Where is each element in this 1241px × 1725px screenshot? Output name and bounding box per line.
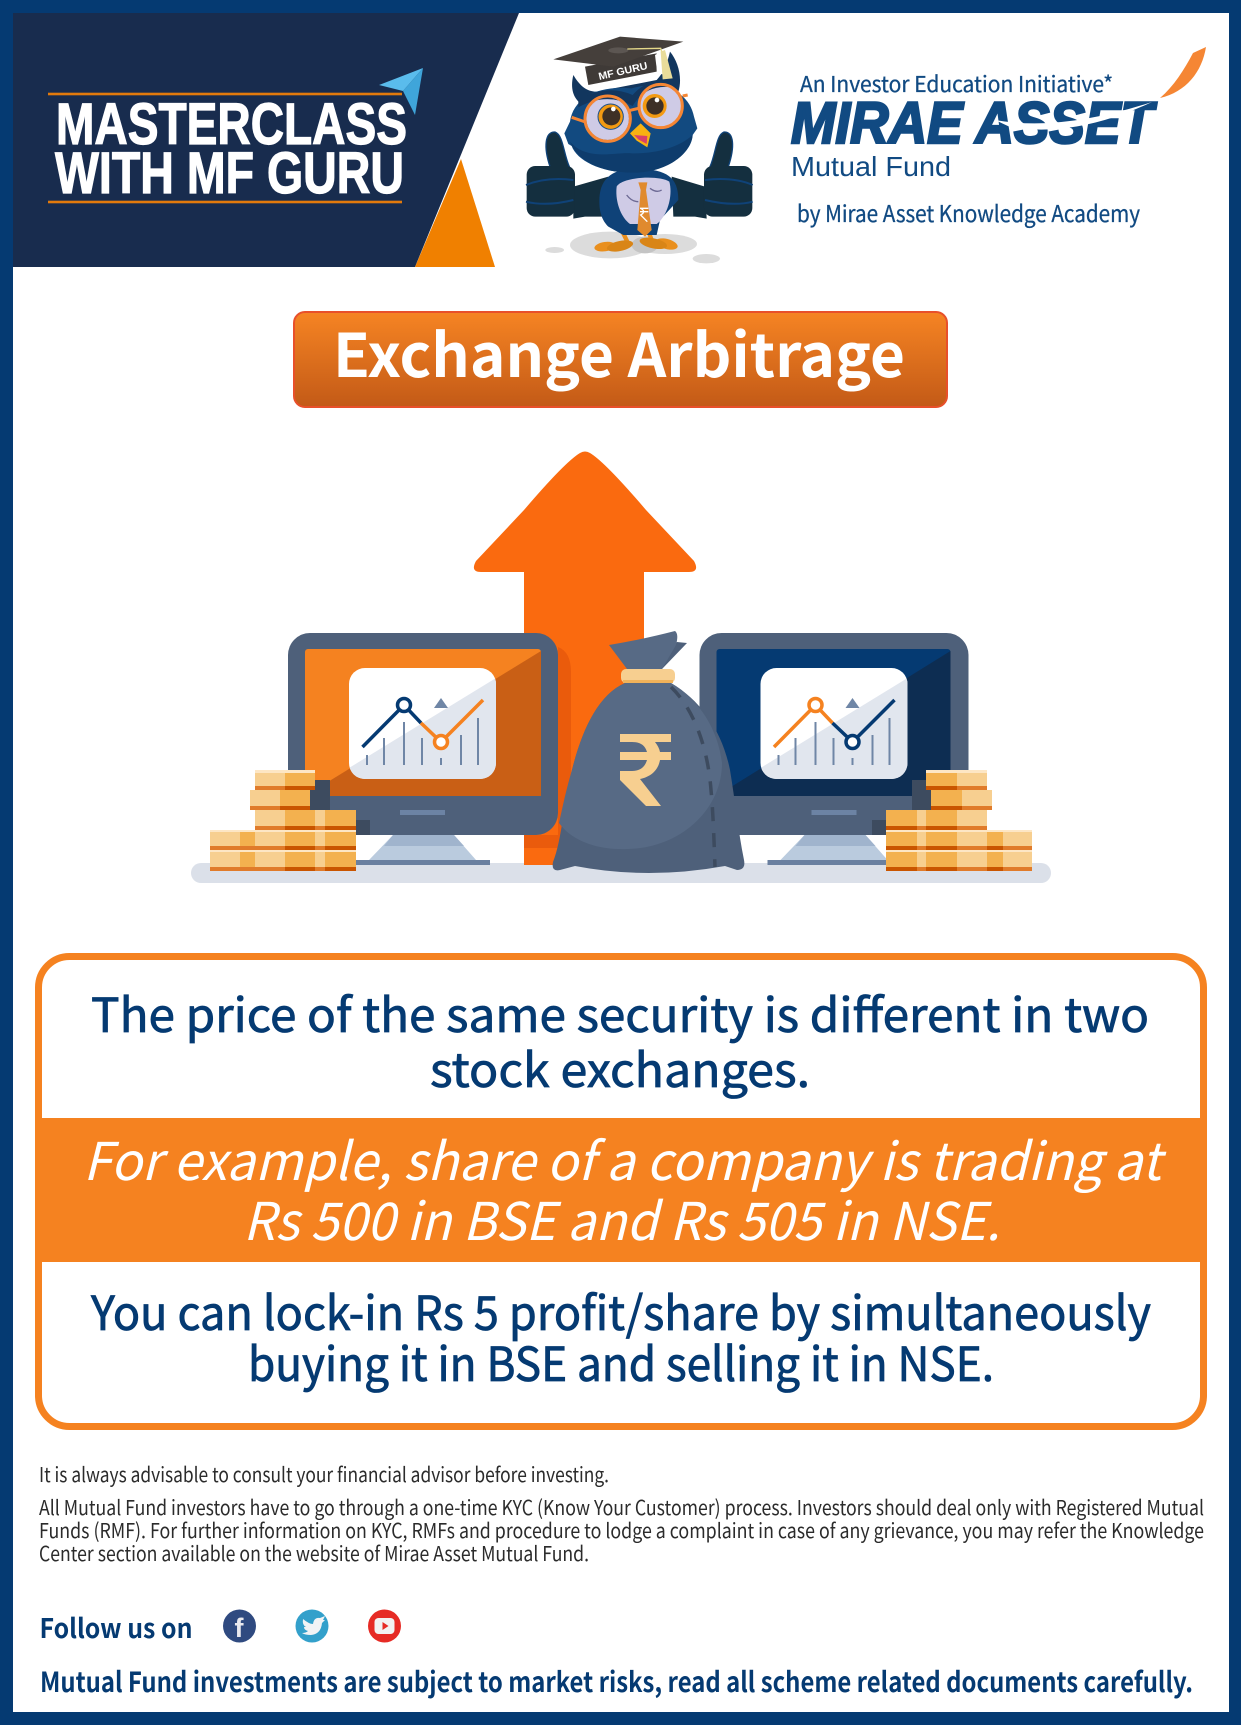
icon: paper plane	[379, 68, 423, 115]
logo: mutual fund: Mutual Fund	[791, 151, 951, 182]
title button: exchange arbitrage: Exchange Arbitrage	[333, 308, 905, 395]
chart card	[760, 668, 908, 779]
line chart	[362, 698, 483, 765]
text: KYC disclaimer	[39, 1491, 1204, 1567]
text: example	[83, 1120, 1167, 1255]
logo: mirae asset wordmark: MIRAE ASSET	[791, 91, 1157, 156]
text: follow us: Follow us on	[40, 1607, 192, 1646]
text: definition: stock exchanges.	[430, 1032, 810, 1101]
logo: investor education initiative line: An Investor Education Initiative*	[800, 67, 1113, 99]
heading: masterclass with mf guru: MASTERCLASS	[56, 92, 407, 157]
band: orange example strip	[35, 1118, 1207, 1262]
text: example: Rs 500 in BSE and Rs 505 in NSE.	[243, 1180, 1000, 1255]
text: example: For example, share of a company is trading at	[83, 1120, 1167, 1195]
arrow: rising orange arrow	[474, 452, 696, 865]
text: profit: buying it in BSE and selling it in NSE.	[248, 1326, 994, 1395]
chart card	[349, 668, 496, 779]
text: profit: You can lock-in Rs 5 profit/share by simultaneously	[90, 1275, 1151, 1344]
icon: youtube	[368, 1610, 401, 1642]
panel: explanation box	[35, 956, 1207, 1426]
text: KYC disclaimer: Center section available on the website of Mirae Asset Mutual Fund.	[39, 1537, 589, 1567]
text: advisory disclaimer: It is always advisable to consult your financial advisor before investing.	[39, 1458, 609, 1488]
mascot cap label: MF GURU	[598, 61, 649, 83]
text: definition	[91, 977, 1149, 1101]
money bag with rupee	[553, 631, 744, 873]
text: profit	[90, 1275, 1151, 1395]
icon: twitter	[296, 1610, 328, 1642]
icon: rupee symbol	[620, 734, 671, 806]
header banner: masterclass	[13, 13, 519, 267]
icon: owl mascot	[526, 37, 753, 263]
line chart	[774, 698, 894, 765]
left monitor with orange screen	[288, 633, 558, 865]
icon: orange triangle	[415, 159, 495, 267]
logo: mirae asset wordmark	[791, 47, 1206, 156]
icon: facebook	[223, 1610, 256, 1643]
coin stack: right	[886, 770, 1032, 871]
heading: masterclass with mf guru: WITH MF GURU	[55, 141, 404, 206]
right monitor with navy screen	[700, 633, 968, 865]
illustration: ground shadow	[191, 863, 1051, 883]
heading: masterclass with mf guru	[48, 92, 407, 206]
coin stack: left	[210, 770, 356, 871]
logo: knowledge academy line: by Mirae Asset Knowledge Academy	[797, 195, 1140, 229]
icon: facebook: f	[234, 1613, 244, 1643]
text: definition: The price of the same security is different in two	[91, 977, 1149, 1046]
